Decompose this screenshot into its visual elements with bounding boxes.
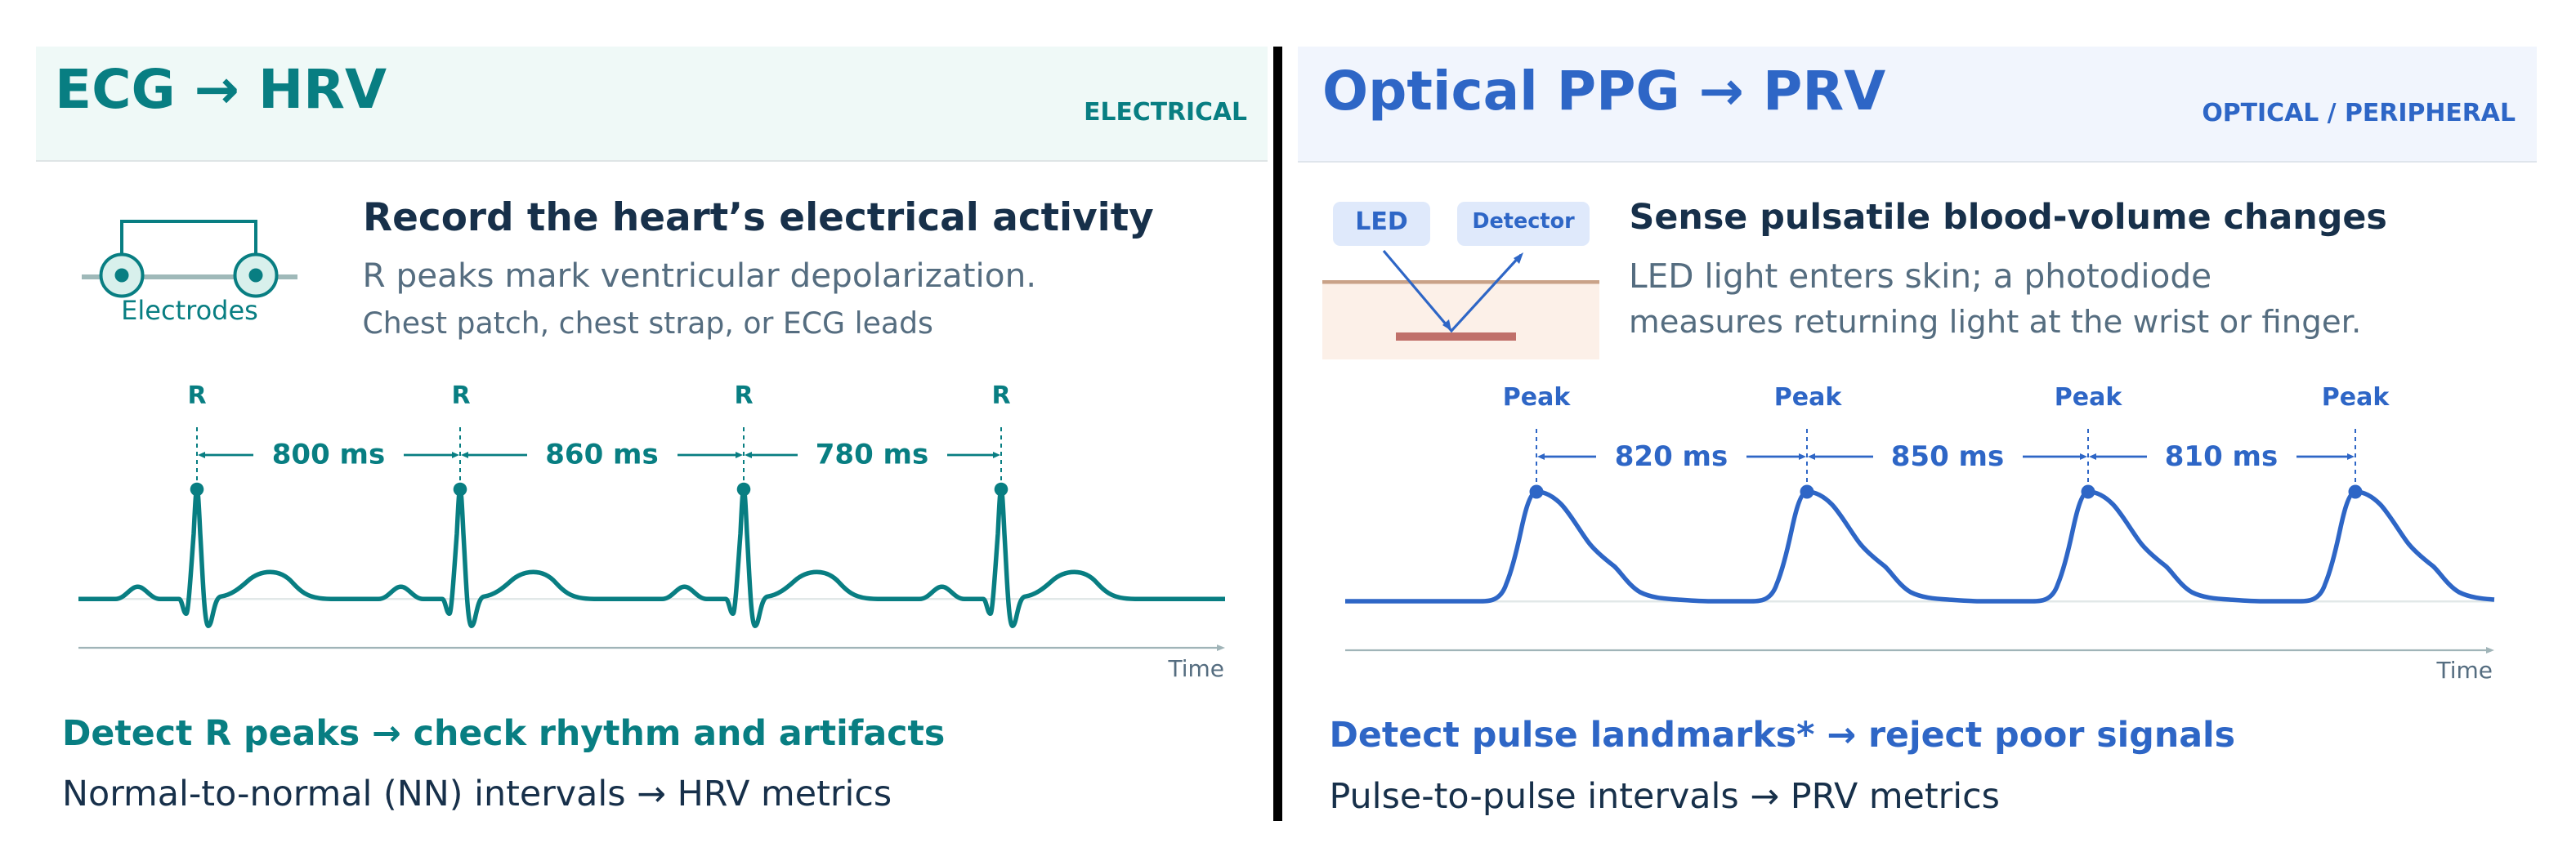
PPG title: Optical PPG → PRV — [1322, 60, 1885, 123]
pulse peak markers: Peak — [1774, 383, 1842, 412]
R peak markers: R — [451, 381, 471, 410]
icon: electrodes: Electrodes — [121, 295, 258, 326]
chart: ECG waveform — [78, 381, 1225, 682]
R peak markers: R — [991, 381, 1011, 410]
PPG tag: OPTICAL / PERIPHERAL — [2202, 99, 2516, 127]
divider — [1273, 47, 1282, 821]
RR interval 860 ms: 860 ms — [545, 438, 659, 471]
ECG time axis: Time — [1167, 655, 1224, 682]
pulse peak markers: Peak — [1503, 383, 1571, 412]
chart: PPG waveform — [1345, 383, 2494, 684]
PPG takeaway: Detect pulse landmarks* → reject poor signals — [1329, 715, 2235, 756]
PPG trace — [1345, 492, 2494, 601]
PP interval 810 ms — [2089, 440, 2355, 473]
pulse peak markers: Peak — [2322, 383, 2390, 412]
R peak markers — [187, 381, 1011, 496]
icon: electrodes — [82, 221, 297, 326]
RR interval 800 ms — [198, 438, 459, 471]
RR interval 860 ms — [461, 438, 743, 471]
ECG description: Chest patch, chest strap, or ECG leads — [363, 306, 933, 341]
ECG heading: Record the heart’s electrical activity — [363, 195, 1154, 240]
PP interval 820 ms: 820 ms — [1615, 440, 1728, 473]
pulse peak markers — [1503, 383, 2390, 498]
ECG description — [363, 256, 1036, 341]
PPG header band — [1298, 47, 2537, 163]
panel: Optical PPG to PRV — [1298, 47, 2537, 817]
RR interval 800 ms: 800 ms — [272, 438, 385, 471]
PPG time axis — [1345, 647, 2494, 684]
R peak markers: R — [187, 381, 207, 410]
RR interval 780 ms: 780 ms — [816, 438, 928, 471]
ECG title: ECG → HRV — [55, 58, 387, 121]
PPG description — [1629, 257, 2361, 341]
icon: LED and detector sensor — [1322, 202, 1599, 359]
PPG description: measures returning light at the wrist or finger. — [1629, 304, 2361, 341]
icon: LED and detector sensor: LED — [1355, 207, 1408, 236]
panel: ECG to HRV — [36, 47, 1268, 814]
PP interval 820 ms — [1537, 440, 1806, 473]
PPG heading: Sense pulsatile blood-volume changes — [1630, 197, 2387, 238]
PP interval 810 ms: 810 ms — [2165, 440, 2278, 473]
PPG time axis: Time — [2435, 657, 2493, 684]
PP interval 850 ms — [1808, 440, 2087, 473]
ECG trace — [78, 489, 1225, 626]
PPG description: LED light enters skin; a photodiode — [1629, 257, 2212, 296]
ECG description: R peaks mark ventricular depolarization. — [363, 256, 1036, 295]
ECG tag: ELECTRICAL — [1084, 98, 1247, 127]
PP interval 850 ms: 850 ms — [1891, 440, 2004, 473]
RR interval 780 ms — [745, 438, 1000, 471]
ECG result: Normal-to-normal (NN) intervals → HRV metrics — [62, 774, 892, 814]
ECG header band — [36, 47, 1268, 162]
PPG result: Pulse-to-pulse intervals → PRV metrics — [1329, 776, 2000, 817]
ECG time axis — [78, 645, 1225, 682]
ECG takeaway: Detect R peaks → check rhythm and artifacts — [62, 713, 945, 754]
pulse peak markers: Peak — [2055, 383, 2122, 412]
R peak markers: R — [734, 381, 754, 410]
icon: LED and detector sensor: Detector — [1472, 209, 1575, 234]
